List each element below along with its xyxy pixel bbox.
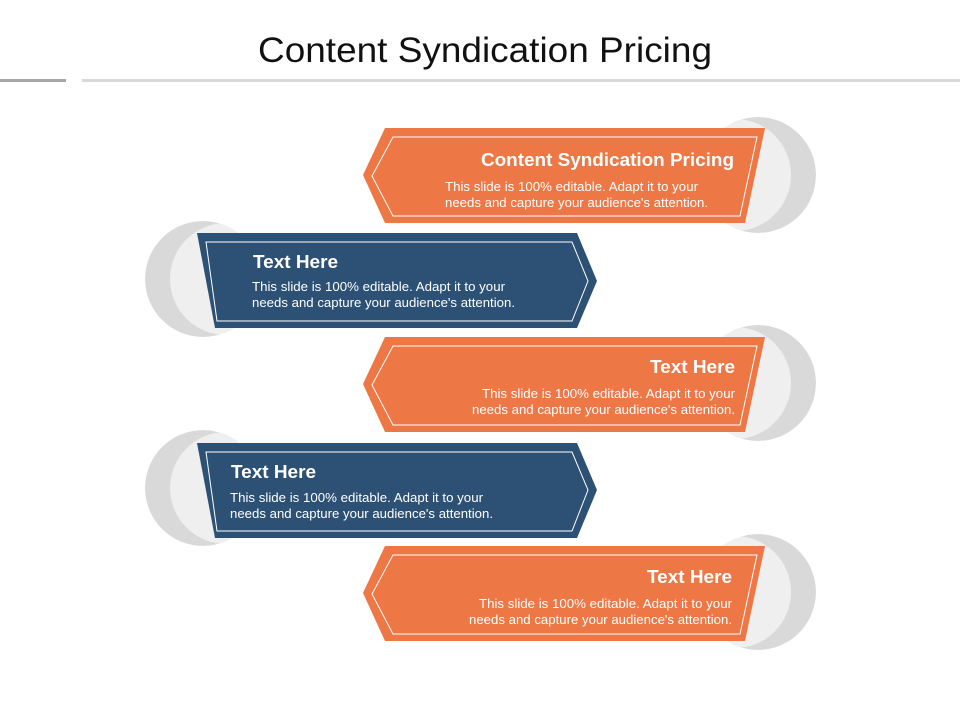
band 4 [197, 443, 597, 538]
band 1: This slide is 100% editable. Adapt it to your [445, 180, 698, 194]
band 2 [197, 233, 597, 328]
band 2: Text Here [253, 252, 338, 272]
circle: 5 [723, 534, 816, 650]
band 5: This slide is 100% editable. Adapt it to your [479, 597, 732, 611]
band 3 [363, 337, 765, 432]
circle: 1 [724, 117, 816, 233]
circle: 3 [723, 325, 816, 441]
band 1 [363, 128, 765, 223]
band 2: This slide is 100% editable. Adapt it to your [252, 280, 505, 294]
circle: 2 [145, 221, 238, 337]
band 5: needs and capture your audience's attention. [469, 613, 732, 627]
band 4: Text Here [231, 462, 316, 482]
band 3: needs and capture your audience's attention. [472, 403, 735, 417]
circle: 4 [145, 430, 240, 546]
band 3: This slide is 100% editable. Adapt it to your [482, 387, 735, 401]
band 5: Text Here [647, 567, 732, 587]
band 4: This slide is 100% editable. Adapt it to your [230, 491, 483, 505]
band 4: needs and capture your audience's attention. [230, 507, 493, 521]
band 1: needs and capture your audience's attention. [445, 196, 708, 210]
band 1: Content Syndication Pricing [481, 150, 734, 170]
band 2: needs and capture your audience's attention. [252, 296, 515, 310]
band 3: Text Here [650, 357, 735, 377]
title: Content Syndication Pricing [258, 31, 712, 70]
band 5 [363, 546, 765, 641]
